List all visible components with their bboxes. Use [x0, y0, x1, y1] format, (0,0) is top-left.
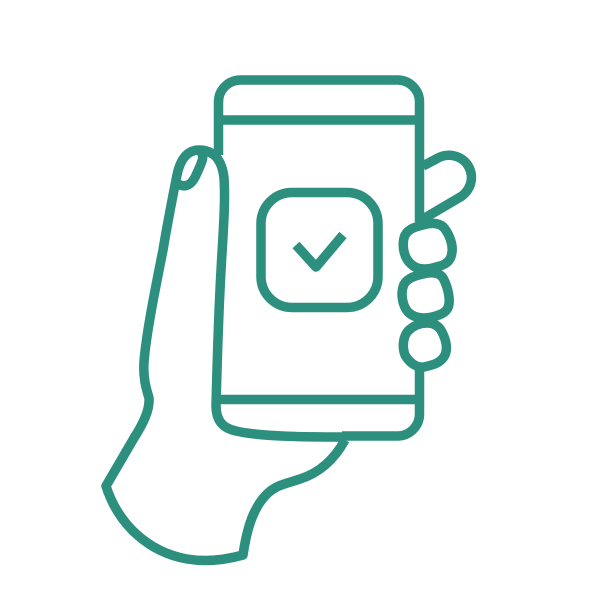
finger one — [403, 223, 452, 269]
finger three — [403, 323, 446, 367]
check mark — [296, 235, 343, 267]
finger two — [402, 273, 449, 318]
check box on screen — [261, 192, 378, 308]
phone body outline — [218, 80, 420, 436]
screen top divider — [219, 115, 420, 125]
phone screen bottom divider — [216, 395, 420, 404]
fingernail — [178, 150, 203, 186]
thumb — [423, 155, 471, 219]
palm and index finger outline — [106, 150, 345, 560]
